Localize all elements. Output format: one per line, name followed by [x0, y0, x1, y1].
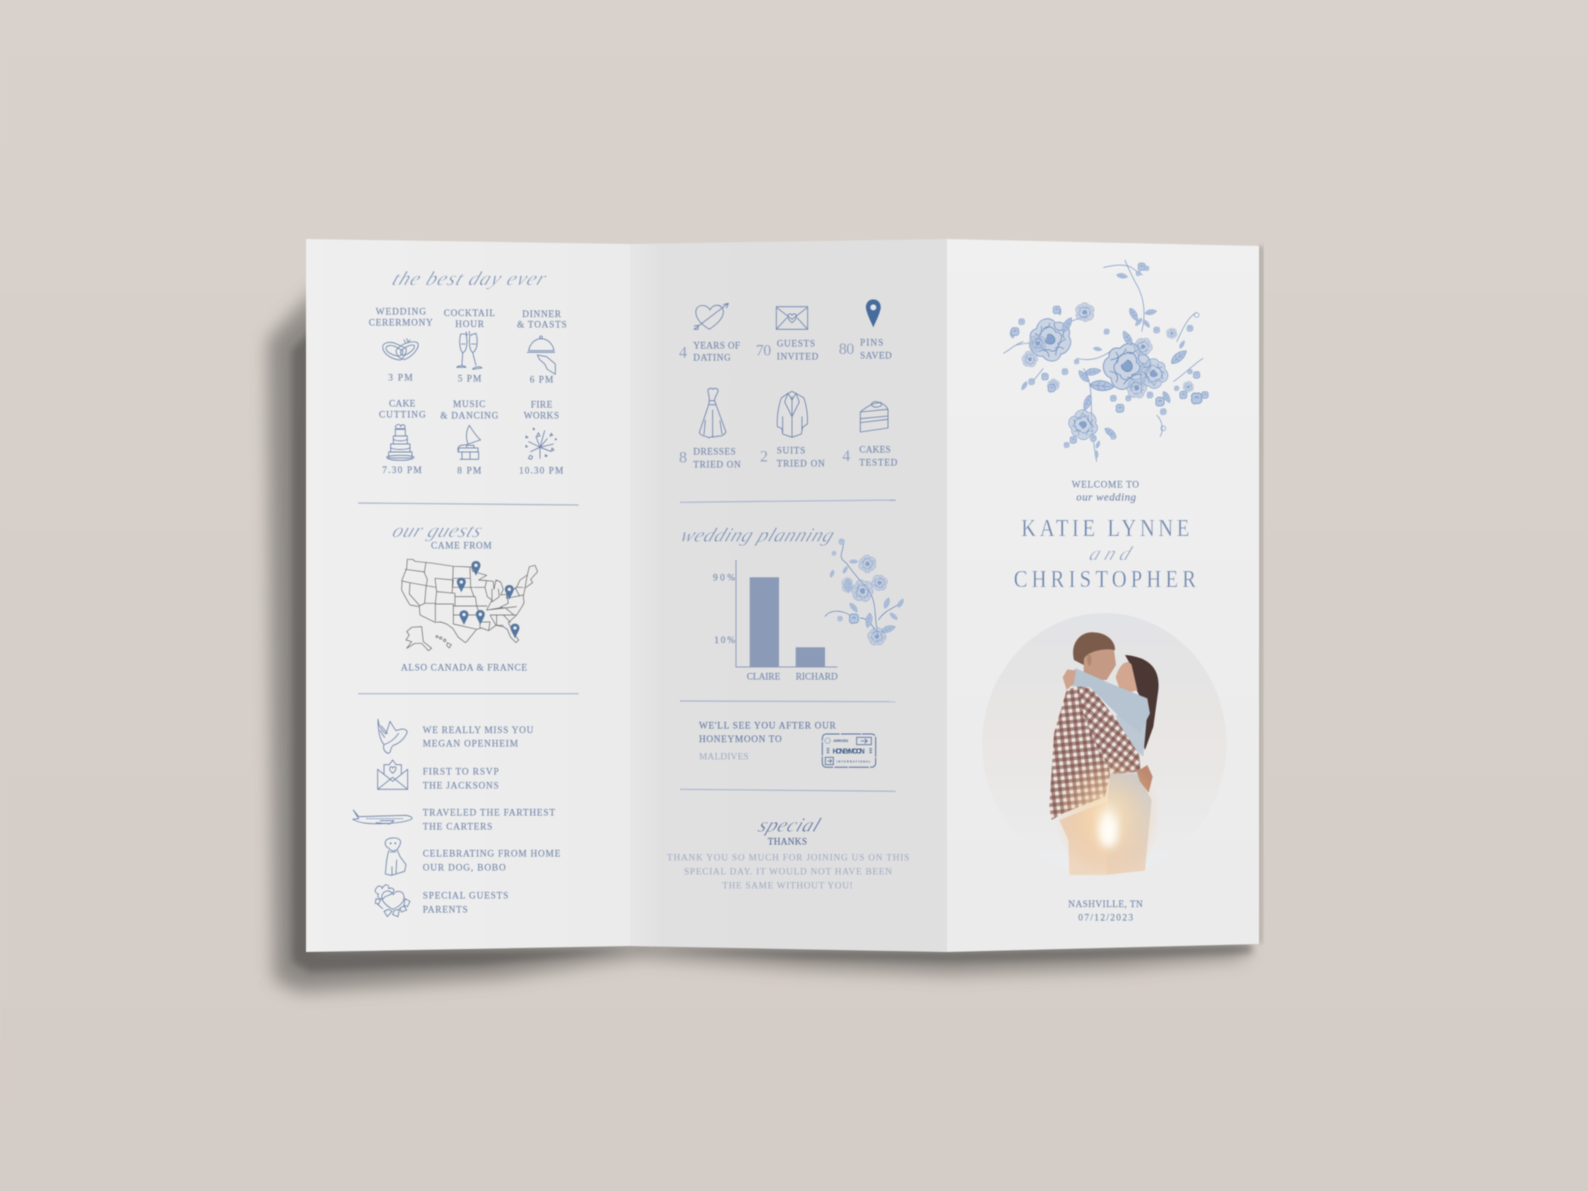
music and dancing item: & DANCING	[440, 411, 499, 421]
special thanks: THANKS	[768, 837, 807, 847]
airplane row: TRAVELED THE FARTHEST	[423, 809, 555, 819]
wedding ceremony item: CERERMONY	[369, 318, 433, 328]
cakes stat: 4	[842, 448, 850, 465]
music and dancing item: MUSIC	[453, 400, 485, 410]
woman torso	[1116, 712, 1147, 757]
airplane row	[353, 809, 555, 832]
wedding ceremony item: WEDDING	[376, 307, 426, 317]
cake cutting item: 7.30 PM	[382, 466, 422, 476]
fire works item: 10.30 PM	[519, 467, 563, 477]
axes	[736, 560, 837, 667]
map caption: ALSO CANADA & FRANCE	[401, 663, 527, 673]
icon: gramophone	[458, 425, 481, 459]
honeymoon block: WE'LL SEE YOU AFTER OUR	[699, 721, 836, 731]
heading: our guests came from: our guests	[389, 520, 486, 542]
bar chart: 90%	[713, 573, 735, 583]
envelope row: THE JACKSONS	[423, 781, 499, 791]
cover sheet	[947, 239, 1259, 952]
bar chart: CLAIRE	[747, 673, 781, 683]
man	[1073, 632, 1115, 670]
icon: honeymoon stamp	[822, 734, 876, 767]
fire works item: WORKS	[524, 412, 559, 422]
floral sprig	[825, 539, 905, 648]
cocktail hour item: HOUR	[455, 320, 485, 330]
cake cutting item: CAKE	[389, 400, 416, 410]
suits stat: 2	[760, 449, 768, 466]
cakes stat: TESTED	[859, 459, 898, 469]
schedule grid	[369, 307, 567, 477]
envelope row	[378, 760, 499, 791]
couple names: and	[1086, 543, 1136, 565]
honeymoon block	[699, 721, 876, 767]
shirt sleeve	[1078, 685, 1141, 774]
special thanks: SPECIAL DAY. IT WOULD NOT HAVE BEEN	[684, 867, 892, 877]
special thanks: THE SAME WITHOUT YOU!	[722, 882, 853, 892]
panel: middle	[630, 239, 947, 952]
years of dating stat	[679, 303, 740, 364]
US map with pins	[402, 559, 538, 651]
airplane row: THE CARTERS	[423, 822, 492, 832]
heart wreath row: SPECIAL GUESTS	[423, 891, 508, 901]
couple photo	[982, 613, 1227, 878]
location and date: 07/12/2023	[1078, 914, 1133, 924]
heart wreath row	[375, 885, 508, 917]
bar chart: 10%	[714, 636, 735, 646]
music and dancing item	[440, 400, 499, 476]
years of dating stat: YEARS OF	[693, 341, 740, 351]
woman face	[1116, 662, 1137, 695]
dinner and toasts item: DINNER	[522, 310, 562, 320]
years of dating stat: DATING	[693, 354, 731, 364]
welcome text: WELCOME TO	[1072, 480, 1139, 490]
years of dating stat: 4	[679, 344, 687, 361]
cocktail hour item: COCKTAIL	[444, 309, 495, 319]
dove row: MEGAN OPENHEIM	[423, 740, 518, 750]
fire works item: FIRE	[531, 401, 553, 411]
dog row: CELEBRATING FROM HOME	[423, 850, 561, 860]
welcome text	[1072, 480, 1139, 503]
woman hair	[1125, 655, 1159, 750]
panel: right cover	[947, 239, 1259, 952]
brochure drop shadow	[268, 246, 1263, 992]
state borders	[402, 562, 527, 631]
stats grid	[679, 299, 898, 470]
couple names	[1014, 514, 1197, 592]
woman arm	[1063, 668, 1150, 733]
location and date: NASHVILLE, TN	[1068, 900, 1143, 910]
bar chart: RICHARD	[796, 673, 838, 683]
heading: the best day ever: the best day ever	[389, 268, 551, 290]
guests invited stat: INVITED	[777, 352, 819, 362]
map outline	[402, 559, 538, 643]
special thanks: THANK YOU SO MUCH FOR JOINING US ON THIS	[667, 853, 909, 863]
icon: honeymoon stamp: HONEYMOON	[833, 748, 865, 755]
floral bouquet	[1003, 260, 1208, 462]
dresses stat: 8	[679, 449, 687, 466]
cakes stat	[842, 402, 898, 469]
shirt body	[1049, 685, 1110, 820]
icon: fireworks	[526, 428, 557, 459]
pins saved stat: 80	[839, 341, 854, 358]
guests invited stat: 70	[756, 343, 771, 360]
guests invited stat: GUESTS	[777, 340, 815, 350]
dove row: WE REALLY MISS YOU	[423, 726, 534, 736]
special thanks: special	[755, 814, 824, 837]
icon: champagne flutes	[457, 331, 482, 369]
fire works item	[519, 401, 563, 477]
pins saved stat: SAVED	[860, 351, 892, 361]
dove row	[378, 719, 534, 753]
suits stat	[760, 391, 825, 469]
bars	[750, 577, 779, 667]
Alaska and Hawaii	[406, 627, 432, 651]
heading: our guests came from	[389, 520, 492, 552]
icon: tiered cake	[387, 424, 414, 460]
music and dancing item: 8 PM	[457, 466, 481, 476]
envelope row: FIRST TO RSVP	[423, 767, 499, 777]
icon: rings	[383, 339, 418, 360]
couple names: KATIE LYNNE	[1021, 514, 1189, 541]
pins saved stat: PINS	[860, 338, 883, 348]
left panel sheet	[306, 239, 630, 952]
cocktail hour item	[444, 309, 495, 384]
special thanks	[667, 814, 909, 892]
bar chart	[713, 560, 838, 683]
suits stat: SUITS	[777, 447, 805, 457]
dresses stat: TRIED ON	[693, 460, 741, 470]
icon: honeymoon stamp: ARRIVED	[833, 739, 849, 743]
sun glow	[1055, 755, 1162, 878]
location and date	[1068, 900, 1143, 924]
dinner and toasts item: 6 PM	[530, 375, 553, 385]
heading: our guests came from: CAME FROM	[431, 542, 492, 552]
heading: wedding planning: wedding planning	[677, 524, 838, 547]
dinner and toasts item	[517, 310, 567, 385]
icon: cloche with hand	[527, 336, 555, 374]
awards list	[353, 719, 561, 917]
cake cutting item	[379, 400, 426, 476]
couple names: CHRISTOPHER	[1014, 565, 1197, 592]
dog row: OUR DOG, BOBO	[423, 864, 506, 874]
man pants	[1059, 802, 1107, 875]
wedding ceremony item	[369, 307, 433, 383]
guests invited stat	[756, 307, 819, 362]
dog row	[385, 838, 561, 875]
panel: left	[306, 239, 630, 952]
suits stat: TRIED ON	[777, 459, 825, 469]
dinner and toasts item: & TOASTS	[517, 321, 567, 331]
heart wreath row: PARENTS	[423, 906, 468, 916]
cake cutting item: CUTTING	[379, 411, 426, 421]
cakes stat: CAKES	[859, 446, 891, 456]
dresses stat: DRESSES	[693, 447, 736, 457]
honeymoon block: MALDIVES	[699, 752, 749, 762]
middle panel sheet	[630, 239, 947, 952]
dresses stat	[679, 388, 741, 470]
jeans	[1105, 773, 1152, 875]
cocktail hour item: 5 PM	[458, 374, 481, 384]
honeymoon block: HONEYMOON TO	[699, 735, 782, 745]
wedding ceremony item: 3 PM	[388, 373, 413, 383]
welcome text: our wedding	[1076, 491, 1136, 503]
icon: honeymoon stamp: INTERNATIONAL	[837, 759, 871, 763]
pins saved stat	[839, 299, 892, 361]
